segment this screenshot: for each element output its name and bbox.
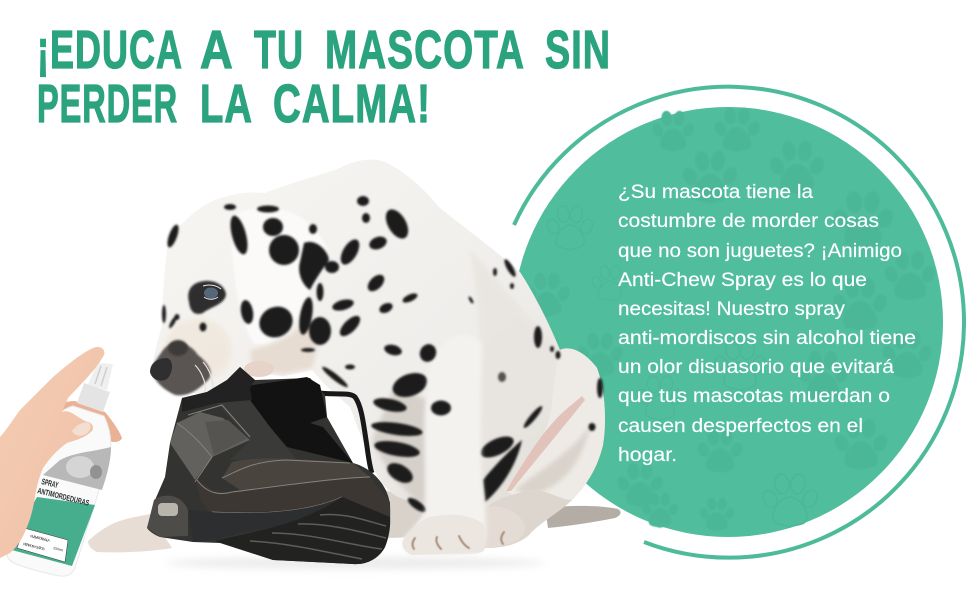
front paw toes — [413, 532, 504, 549]
text block: description: hogar. — [618, 444, 677, 466]
front paw base — [402, 515, 485, 555]
mid panel — [205, 420, 248, 455]
nozzle — [88, 363, 113, 390]
panel: green circle — [513, 87, 964, 558]
text block: description: anti-mordiscos sin alcohol tiene — [618, 327, 916, 349]
rear thigh — [505, 348, 605, 530]
text block: description: costumbre de morder cosas — [618, 210, 879, 232]
label green band — [8, 497, 95, 566]
black laces mass — [240, 377, 353, 463]
text block: description: ¿Su mascota tiene la — [618, 181, 813, 203]
thigh crease shading — [515, 425, 590, 494]
illustration: black sneaker — [147, 367, 390, 564]
sneaker stitch lines — [177, 405, 370, 513]
sole ridges — [250, 514, 386, 559]
shoe collar — [182, 367, 255, 412]
rear paw — [484, 506, 525, 548]
bottle body — [7, 406, 111, 576]
neck shadow under ear — [250, 320, 318, 374]
spots — [162, 196, 603, 515]
text block: description: causen desperfectos en el — [618, 415, 863, 437]
illustration: dalmatian puppy — [88, 160, 621, 569]
text block: description — [618, 181, 916, 466]
title: SIN — [545, 20, 611, 80]
eye patch — [188, 281, 226, 314]
label info box: NUEVA FÓRMULA — [30, 533, 51, 543]
sole — [215, 497, 390, 564]
toe upper — [197, 477, 390, 517]
title: A — [200, 20, 234, 80]
title — [37, 20, 611, 134]
label photo — [43, 447, 111, 490]
dog body — [152, 160, 605, 555]
title: PERDER — [37, 74, 178, 134]
label info box — [17, 528, 68, 562]
back shading — [470, 250, 558, 462]
text block: description: necesitas! Nuestro spray — [618, 298, 845, 320]
text block: description: que tus mascotas muerdan o — [618, 385, 890, 407]
illustration: hand holding spray bottle — [0, 347, 122, 576]
text block: description: Anti-Chew Spray es lo que — [618, 269, 867, 291]
label product name — [37, 476, 91, 508]
ring arc — [514, 87, 964, 558]
text block: description: que no son juguetes? ¡Animigo — [618, 240, 902, 262]
label product name: SPRAY — [41, 476, 60, 490]
label info box: PERROS Y GATOS — [23, 542, 46, 551]
heel air unit — [147, 496, 188, 537]
far front leg — [385, 490, 428, 538]
bottle cap collar — [77, 383, 110, 412]
upper grey panel — [170, 412, 250, 480]
fingernail — [72, 422, 90, 436]
midsole — [188, 497, 342, 542]
outlined paw watermarks — [545, 205, 820, 527]
shoe base silhouette — [147, 367, 390, 564]
tail — [545, 506, 621, 528]
title: TU — [254, 20, 304, 80]
hand — [0, 347, 104, 558]
shoe dark tongue — [217, 398, 297, 460]
circle fill — [513, 107, 943, 537]
back finger — [48, 401, 122, 442]
title: MASCOTA — [325, 20, 525, 80]
title: LA — [200, 74, 253, 134]
title: ¡EDUCA — [37, 20, 183, 80]
ground shadow — [165, 557, 545, 569]
front leg — [402, 334, 486, 555]
text block: description: un olor disuasorio que evitará — [618, 356, 894, 378]
paw watermarks — [522, 107, 938, 531]
label product name: ANTIMORDEDURAS — [37, 486, 91, 508]
label info box: 250ml — [53, 546, 64, 552]
lace loop — [320, 393, 372, 473]
toe panel — [222, 458, 370, 490]
rear haunch base — [484, 490, 572, 548]
chest tint — [372, 385, 427, 505]
far paw — [88, 514, 172, 552]
title: CALMA! — [273, 74, 431, 134]
leg spots — [417, 341, 451, 416]
muzzle and nose — [150, 340, 274, 395]
muzzle tint — [164, 318, 232, 382]
ear — [231, 208, 329, 344]
belly skin stripe — [506, 396, 585, 491]
